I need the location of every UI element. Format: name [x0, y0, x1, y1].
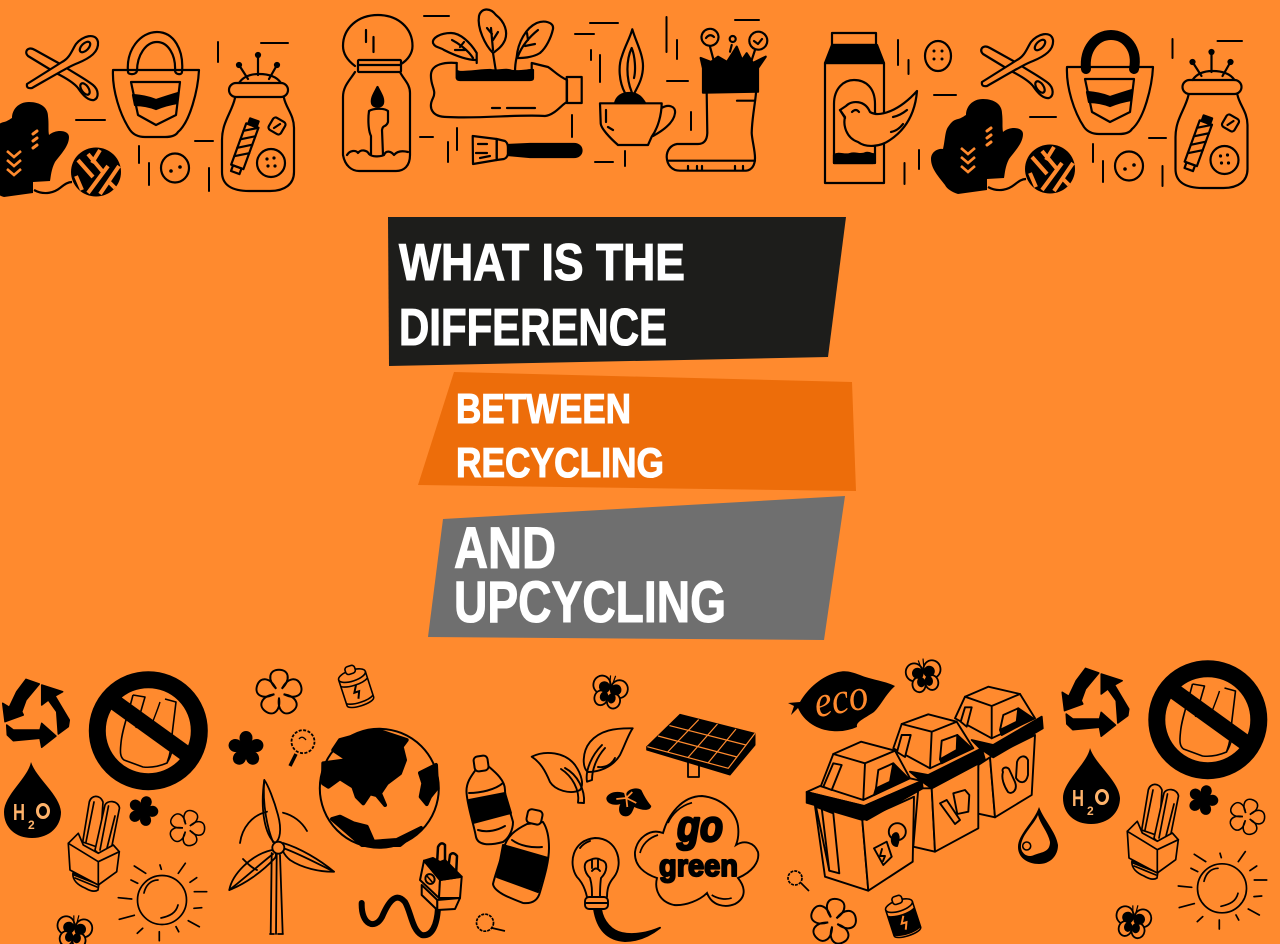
- icon: energy-saving bulb right: [1127, 784, 1178, 879]
- panel: between recycling: BETWEEN: [456, 385, 631, 432]
- icon: butterfly bottom right: [1113, 902, 1153, 940]
- icon: large bottle: [493, 808, 549, 903]
- icon: light bulb with cord: [573, 838, 660, 941]
- icon: black flower: [227, 731, 265, 767]
- panel: what is the difference: [388, 217, 846, 366]
- icon: dandelion small: [476, 914, 505, 931]
- icon: dandelion: [290, 730, 314, 766]
- icon: tote bag: [113, 32, 199, 137]
- icon: ball of yarn: [34, 148, 121, 196]
- icon: battery: [336, 662, 375, 710]
- icon: water drop outline: [1018, 807, 1058, 864]
- icon: rain boot with flowers: [667, 29, 767, 171]
- icon: dandelion near bins: [788, 871, 809, 891]
- icon: wind turbine: [229, 780, 334, 934]
- title block: [388, 217, 856, 640]
- icon: small outline flower right: [1222, 793, 1271, 841]
- icon: black mitten: [0, 102, 69, 197]
- icon: flower under bins: [805, 895, 861, 944]
- panel: between recycling: [418, 372, 856, 491]
- icon: black battery: [883, 892, 922, 940]
- panel: and upcycling: [428, 496, 845, 640]
- icon: H2O drop right: [1063, 748, 1120, 824]
- icon: eco leaf: [788, 669, 895, 731]
- icon: outline flower: [254, 670, 304, 716]
- icon: earth globe: [320, 729, 439, 848]
- icon: recycle arrows: [3, 679, 69, 747]
- panel: between recycling: RECYCLING: [456, 439, 664, 486]
- icon: small black flower: [122, 791, 164, 831]
- panel: what is the difference: DIFFERENCE: [399, 299, 667, 357]
- icon: pin cushion jar: [222, 53, 294, 191]
- icon: no plastic bags right: [1157, 669, 1259, 771]
- icon: plant in a cup: [600, 29, 675, 145]
- icon: candle in a jar: [343, 15, 412, 171]
- bottom icon border: [3, 656, 1271, 944]
- icon: eco leaf: eco: [810, 669, 872, 727]
- icon: H2O drop: [4, 762, 61, 838]
- icon: small bottle: [466, 755, 513, 844]
- icon: scissors right: [981, 34, 1053, 98]
- icon: black butterfly: [606, 788, 651, 816]
- icon: sun right: [1178, 852, 1267, 929]
- icon: tote bag right: [1067, 35, 1153, 134]
- icon: button: [161, 154, 189, 182]
- panel: what is the difference: WHAT IS THE: [399, 234, 685, 292]
- panel: and upcycling: UPCYCLING: [454, 570, 726, 635]
- icon: go green cloud: green: [659, 848, 738, 883]
- bin: front: [807, 742, 923, 891]
- icon: go green cloud: [635, 796, 758, 906]
- icon: recycle arrows right: [1062, 668, 1129, 736]
- icon: go green cloud: go: [676, 802, 723, 851]
- icon: butterfly above bins: [904, 656, 944, 694]
- icon: black mitten right: [931, 99, 1023, 194]
- icon: milk carton birdhouse: [825, 33, 917, 183]
- icon: plastic bottle planter: [431, 9, 582, 117]
- icon: small outline flower: [162, 805, 211, 852]
- icon: ball of yarn right: [988, 144, 1075, 194]
- icon: button right: [1115, 152, 1143, 180]
- bin: far: [955, 687, 1043, 817]
- icon: two leaves: [532, 728, 633, 803]
- icon: plug with cable: [362, 843, 462, 935]
- icon: paint brush: [473, 136, 582, 164]
- icon: pin cushion jar right: [1176, 50, 1248, 188]
- bin: middle: [893, 714, 985, 852]
- icon: solar panel: [647, 714, 755, 777]
- icon: carton button: [925, 41, 951, 71]
- icon: sun: [118, 863, 207, 941]
- top icon border: [0, 9, 1248, 197]
- icon: black flower right: [1182, 780, 1224, 820]
- icon: no plastic bags: [97, 680, 199, 782]
- icon: energy-saving bulb: [68, 796, 120, 891]
- icon: butterfly bottom left: [54, 912, 94, 944]
- icon: butterfly top: [588, 671, 631, 711]
- icon: scissors: [26, 36, 98, 100]
- panel: and upcycling: AND: [454, 516, 556, 581]
- icon: recycling bins: [807, 687, 1043, 891]
